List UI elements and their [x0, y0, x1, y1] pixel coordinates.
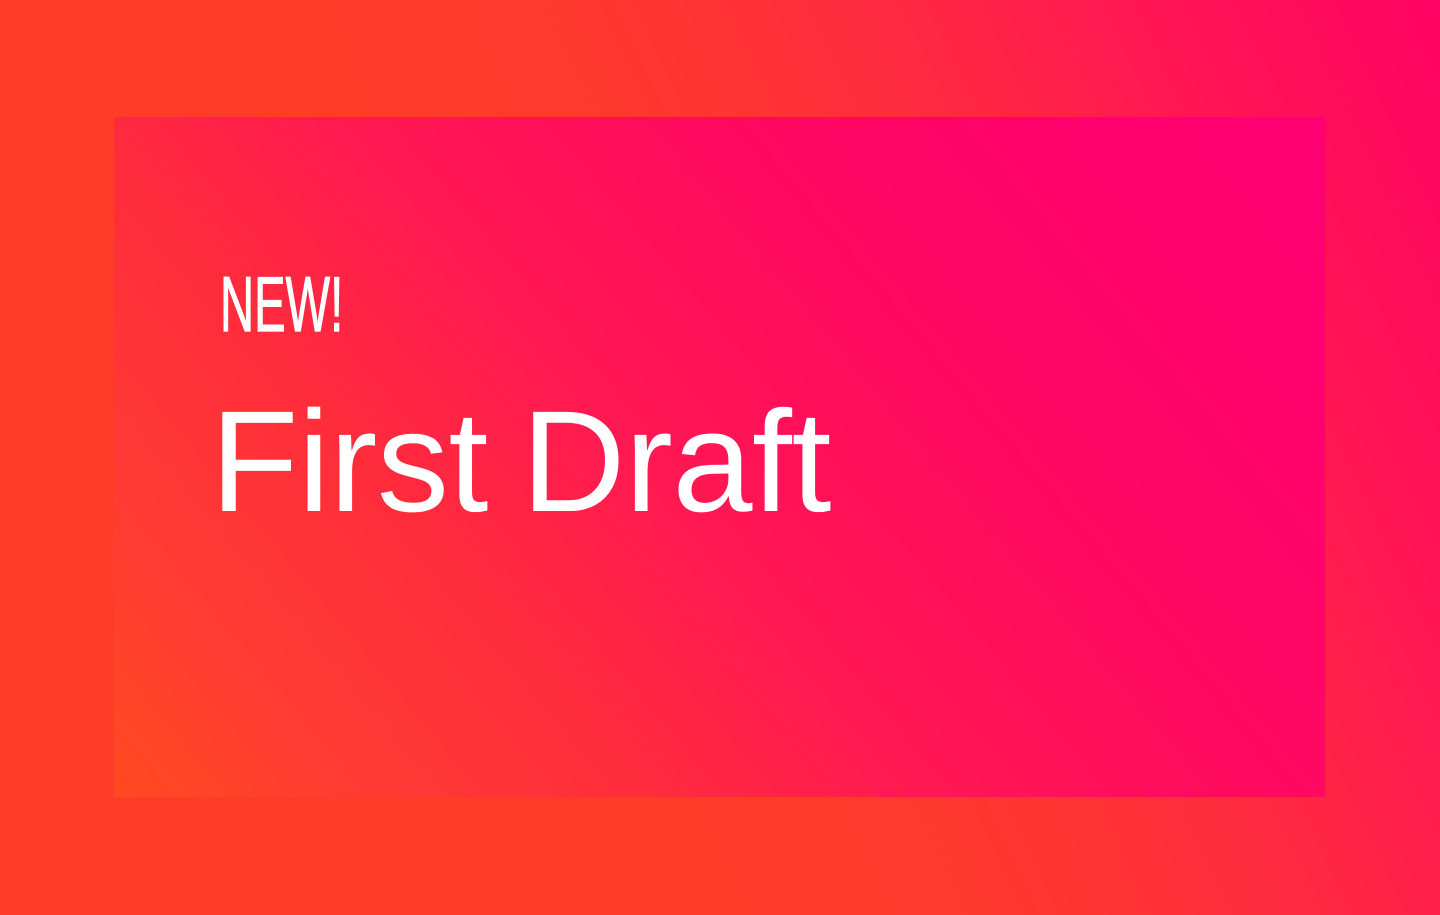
title: First Draft: First Draft — [210, 381, 831, 542]
panel: inner gradient card — [114, 117, 1325, 797]
label: NEW!: NEW! — [220, 260, 343, 348]
